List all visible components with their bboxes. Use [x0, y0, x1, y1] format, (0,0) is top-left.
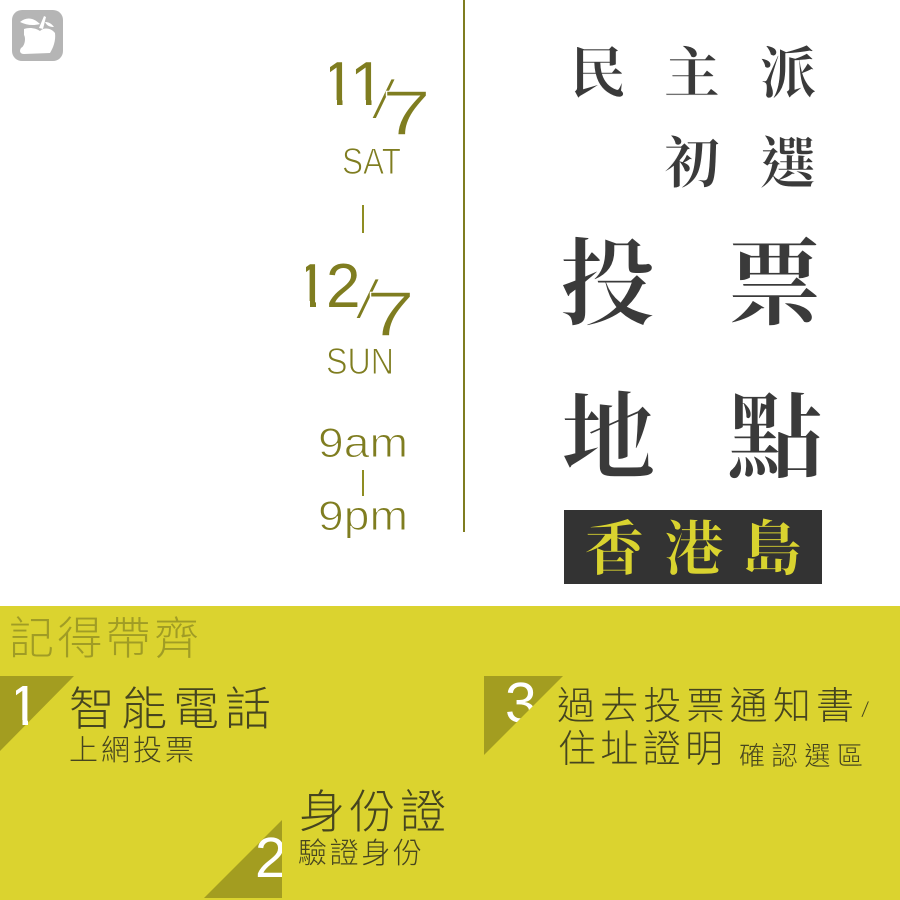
date: second polling day: 12	[294, 252, 360, 321]
item 2: identity card: 驗證身份	[298, 837, 422, 870]
opening hours: 9pm	[318, 492, 408, 539]
title: 初	[664, 134, 720, 196]
item 2: identity card	[204, 786, 446, 898]
title: 票	[727, 232, 822, 338]
opening hours: 9am	[318, 419, 408, 466]
district label: Hong Kong Island: 島	[742, 517, 802, 583]
title: 投	[560, 232, 655, 338]
title: 選	[760, 134, 821, 196]
date: first polling day	[330, 62, 426, 174]
date: second polling day: /	[353, 270, 382, 330]
title	[560, 44, 823, 492]
district label: Hong Kong Island: 香	[584, 517, 644, 583]
date: first polling day: 7	[382, 79, 431, 149]
item 3: voting notice or proof of address: /	[860, 697, 871, 722]
item 3: voting notice or proof of address: 住址證明	[558, 729, 723, 771]
item 3: voting notice or proof of address: 過去投票通知書	[557, 686, 854, 728]
panel heading: 記得帶齊	[9, 613, 199, 664]
date: first polling day: 11	[321, 50, 384, 119]
date: second polling day: SUN	[326, 341, 394, 382]
item 2: identity card: 2	[255, 826, 287, 890]
icon: apple logo	[12, 10, 63, 61]
panel: what to bring	[0, 606, 900, 900]
item 1: smartphone	[0, 674, 271, 767]
item 3: voting notice or proof of address: 3	[505, 671, 537, 735]
date: first polling day: /	[369, 70, 398, 130]
item 3: voting notice or proof of address: 確認選區	[739, 741, 863, 771]
item 1: smartphone: 上網投票	[69, 734, 194, 767]
date: second polling day: 7	[366, 280, 415, 350]
title: 民	[570, 44, 626, 106]
title: 派	[760, 44, 816, 106]
title: 點	[728, 386, 823, 492]
district label: Hong Kong Island	[564, 510, 822, 584]
vertical divider	[463, 0, 465, 532]
opening hours	[318, 419, 408, 539]
item 1: smartphone: 智能電話	[69, 683, 271, 735]
date: second polling day	[306, 264, 410, 374]
title: 地	[561, 386, 656, 492]
title: 主	[664, 44, 720, 106]
item 3: voting notice or proof of address	[484, 671, 871, 771]
item 2: identity card: 身份證	[299, 786, 446, 838]
range marker between dates	[362, 205, 364, 233]
item 1: smartphone: 1	[8, 674, 40, 738]
date: first polling day: SAT	[342, 141, 401, 182]
district label: Hong Kong Island: 港	[664, 517, 724, 583]
